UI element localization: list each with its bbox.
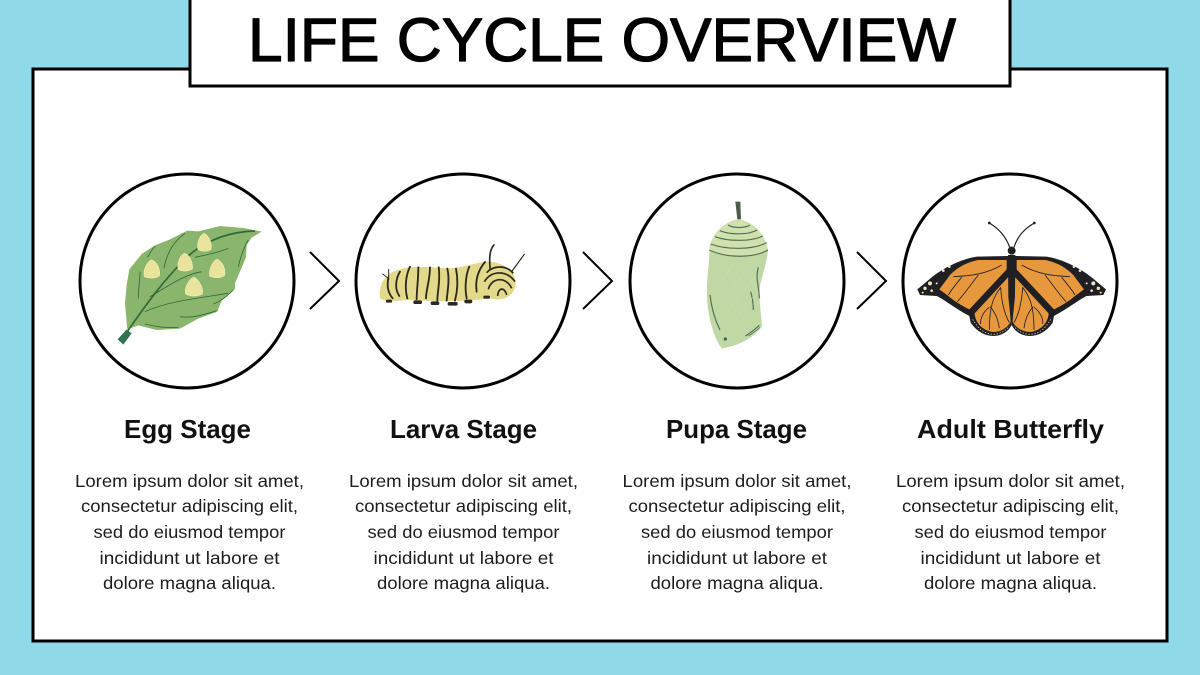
heading: pupa stage: Pupa Stage: [666, 414, 807, 444]
stage: egg: [75, 174, 304, 593]
title box: [190, 0, 1010, 86]
text: egg stage: dolore magna aliqua.: [103, 573, 276, 593]
text: adult butterfly: dolore magna aliqua.: [924, 573, 1097, 593]
text: larva stage: sed do eiusmod tempor: [368, 522, 560, 542]
text: pupa stage: incididunt ut labore et: [647, 548, 827, 568]
text: adult butterfly: consectetur adipiscing elit,: [902, 496, 1119, 516]
arrow 2: [583, 252, 612, 309]
text: larva stage: Lorem ipsum dolor sit amet,: [349, 471, 578, 491]
larva circle: [356, 174, 570, 388]
adult circle: [903, 174, 1117, 388]
right wings: [1012, 256, 1106, 336]
text: adult butterfly: Lorem ipsum dolor sit amet,: [896, 471, 1125, 491]
text: egg stage: Lorem ipsum dolor sit amet,: [75, 471, 304, 491]
icon: butterfly: [917, 222, 1106, 336]
text: larva stage: dolore magna aliqua.: [377, 573, 550, 593]
text: egg stage: consectetur adipiscing elit,: [81, 496, 298, 516]
text: pupa stage: [622, 471, 852, 593]
text: egg stage: [75, 471, 304, 593]
text: adult butterfly: incididunt ut labore et: [920, 548, 1101, 568]
text: pupa stage: dolore magna aliqua.: [650, 573, 824, 593]
text: pupa stage: consectetur adipiscing elit,: [628, 496, 846, 516]
icon: chrysalis: [707, 202, 768, 348]
title: LIFE CYCLE OVERVIEW: [248, 6, 956, 74]
stage: pupa: [622, 174, 852, 593]
text: pupa stage: sed do eiusmod tempor: [641, 522, 833, 542]
text: larva stage: [349, 471, 578, 593]
text: egg stage: sed do eiusmod tempor: [94, 522, 286, 542]
text: larva stage: incididunt ut labore et: [374, 548, 554, 568]
text: larva stage: consectetur adipiscing elit,: [355, 496, 572, 516]
text: adult butterfly: sed do eiusmod tempor: [914, 522, 1107, 542]
stage: larva: [349, 174, 578, 593]
heading: egg stage: Egg Stage: [124, 414, 251, 444]
left wings: [917, 256, 1012, 336]
arrow 3: [857, 252, 886, 309]
pupa circle: [630, 174, 844, 388]
icon: caterpillar: [380, 245, 524, 306]
heading: larva stage: Larva Stage: [390, 414, 537, 444]
text: adult butterfly: [896, 471, 1125, 593]
icon: leaf with eggs: [118, 226, 262, 345]
egg circle: [80, 174, 294, 388]
text: pupa stage: Lorem ipsum dolor sit amet,: [622, 471, 852, 491]
heading: adult butterfly: Adult Butterfly: [917, 414, 1105, 444]
arrow 1: [310, 252, 339, 309]
text: egg stage: incididunt ut labore et: [100, 548, 280, 568]
stage: adult: [896, 174, 1125, 593]
